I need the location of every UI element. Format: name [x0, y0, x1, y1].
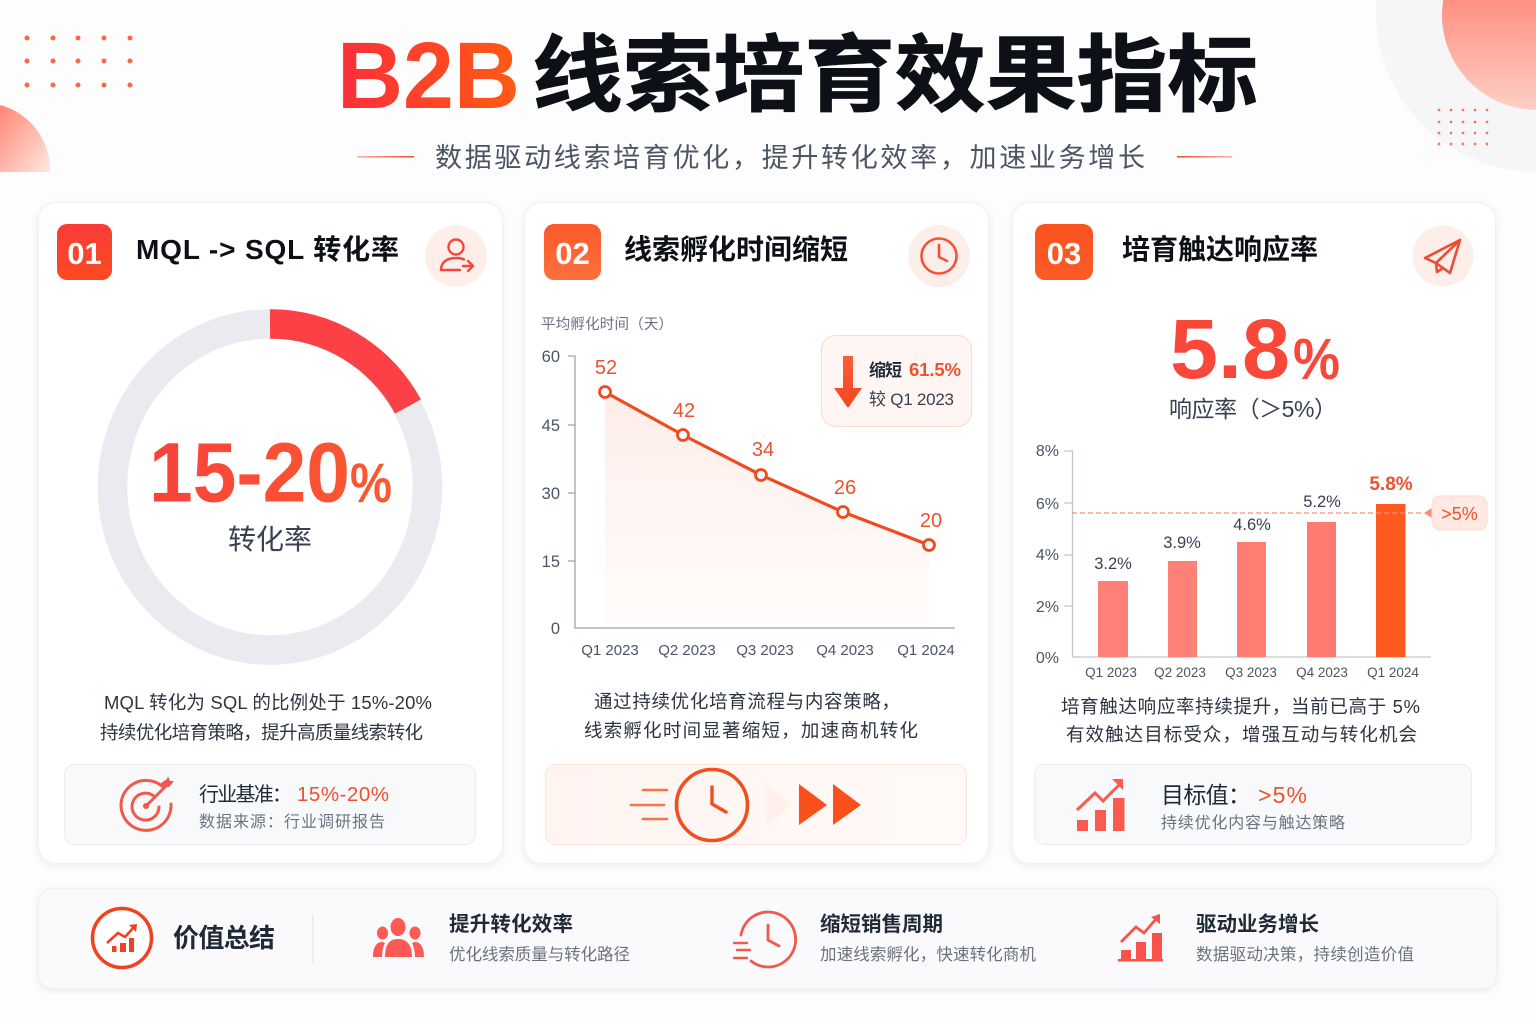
callout: reduced 61.5%: 61.5% — [909, 359, 961, 380]
line chart: 45 — [542, 417, 560, 435]
big value: 响应率（＞5%） — [1169, 396, 1337, 422]
description: 通过持续优化培育流程与内容策略， — [594, 691, 900, 712]
heading: MQL -> SQL 转化率 — [136, 234, 399, 265]
line chart: 34 — [752, 439, 774, 461]
item: shorten sales cycle — [734, 912, 1036, 967]
bar chart: 3.9% — [1163, 534, 1201, 552]
donut value: 15-20 — [149, 426, 350, 520]
line chart: 20 — [920, 510, 942, 532]
title: 线索培育效果指标 — [532, 28, 1258, 122]
heading: 培育触达响应率 — [1122, 234, 1318, 265]
bar chart: 8% — [1036, 443, 1059, 460]
line chart: 15 — [542, 553, 560, 571]
icon: paper plane — [1412, 226, 1474, 286]
item: improve conversion: 提升转化效率 — [449, 913, 573, 936]
icon: person with arrow — [425, 225, 487, 287]
bar chart: 5.2% — [1303, 493, 1341, 511]
icon: speed lines and clock — [631, 770, 748, 840]
icon: people — [373, 918, 424, 957]
item: drive growth — [1118, 913, 1414, 964]
icon: target — [121, 776, 174, 830]
target box — [1034, 764, 1472, 844]
summary heading: 价值总结 — [173, 923, 275, 953]
bar chart: 5.8% — [1369, 474, 1413, 495]
bar chart: 2% — [1036, 599, 1059, 616]
icon: growth bars — [1118, 914, 1163, 962]
line chart: 30 — [542, 485, 560, 503]
big value: 5.8 — [1170, 302, 1290, 396]
description: 培育触达响应率持续提升，当前已高于 5% — [1061, 696, 1420, 717]
line chart — [542, 348, 955, 659]
line chart: Q3 2023 — [736, 642, 794, 659]
donut chart — [112, 324, 428, 650]
background decoration: top left dots and quarter circle — [0, 36, 132, 172]
line chart: Q2 2023 — [658, 642, 716, 659]
benchmark text: 行业基准： — [199, 783, 292, 806]
badge 01 — [57, 224, 112, 280]
line chart: 26 — [834, 477, 856, 499]
icon: clock — [908, 225, 970, 287]
badge 03: 03 — [1047, 236, 1081, 271]
title — [337, 23, 1258, 129]
target badge — [1424, 496, 1487, 530]
heading: 线索孵化时间缩短 — [624, 234, 848, 265]
badge 02: 02 — [555, 236, 590, 271]
icon: growth in circle — [92, 908, 152, 968]
target badge: >5% — [1441, 504, 1478, 524]
icon: clock with speed lines — [734, 912, 796, 967]
panel: MQL to SQL conversion — [38, 202, 502, 864]
callout: reduced 61.5%: 较 Q1 2023 — [869, 390, 954, 409]
badge 03 — [1035, 224, 1093, 280]
big value: % — [1293, 327, 1340, 392]
target note: 持续优化内容与触达策略 — [1161, 814, 1345, 832]
bar chart: Q1 2024 — [1367, 665, 1419, 680]
bar chart: 0% — [1036, 650, 1059, 667]
benchmark box — [64, 764, 476, 844]
donut label: 转化率 — [228, 524, 312, 555]
bar chart: 4% — [1036, 547, 1059, 564]
description — [584, 691, 918, 741]
source text: 数据来源：行业调研报告 — [199, 813, 385, 831]
background decoration: top right circles — [1376, 0, 1536, 172]
description — [100, 692, 432, 743]
donut percent: % — [350, 451, 392, 514]
line chart: Q4 2023 — [816, 642, 874, 659]
speed box — [546, 764, 966, 844]
bar chart: 4.6% — [1233, 516, 1271, 534]
item: shorten sales cycle: 加速线索孵化，快速转化商机 — [820, 945, 1036, 964]
panel: touch response rate — [1012, 202, 1496, 864]
description: MQL 转化为 SQL 的比例处于 15%-20% — [104, 692, 432, 713]
line chart: 0 — [551, 620, 560, 638]
bar chart: 6% — [1036, 496, 1059, 513]
item: drive growth: 数据驱动决策，持续创造价值 — [1196, 945, 1414, 964]
item: improve conversion: 优化线索质量与转化路径 — [449, 945, 630, 964]
icon: fast-forward arrows — [766, 784, 861, 825]
bar chart: 3.2% — [1094, 555, 1132, 573]
panel: value summary — [38, 888, 1496, 988]
item: improve conversion — [373, 913, 630, 964]
benchmark box: 15%-20% — [297, 783, 389, 806]
description — [1061, 696, 1420, 745]
target text: 目标值： — [1161, 782, 1251, 808]
item: drive growth: 驱动业务增长 — [1196, 913, 1319, 936]
icon: down arrow — [834, 356, 862, 408]
line chart: Q1 2023 — [581, 642, 639, 659]
subtitle: 数据驱动线索培育优化，提升转化效率，加速业务增长 — [435, 143, 1145, 173]
line chart: 42 — [673, 400, 695, 422]
icon: growth chart — [1077, 779, 1124, 831]
callout: reduced 61.5% — [822, 336, 972, 426]
line chart: Q1 2024 — [897, 642, 955, 659]
badge 01: 01 — [67, 236, 102, 271]
badge 02 — [544, 224, 601, 280]
big value — [1169, 302, 1340, 422]
chart title: 平均孵化时间（天） — [541, 316, 673, 333]
description: 线索孵化时间显著缩短，加速商机转化 — [584, 720, 918, 741]
description: 有效触达目标受众，增强互动与转化机会 — [1066, 724, 1417, 745]
line chart: 60 — [542, 348, 560, 366]
callout: reduced 61.5%: 缩短 — [869, 360, 902, 380]
bar chart — [1036, 443, 1487, 680]
item: shorten sales cycle: 缩短销售周期 — [820, 912, 943, 936]
bar chart: Q3 2023 — [1225, 665, 1277, 680]
panel: incubation time — [524, 202, 988, 864]
line chart: 52 — [595, 357, 617, 379]
bar chart: Q4 2023 — [1296, 665, 1348, 680]
bar chart: Q1 2023 — [1085, 665, 1137, 680]
bar chart: Q2 2023 — [1154, 665, 1206, 680]
title: B2B — [337, 23, 520, 129]
target box: >5% — [1258, 782, 1307, 808]
description: 持续优化培育策略，提升高质量线索转化 — [100, 722, 423, 743]
